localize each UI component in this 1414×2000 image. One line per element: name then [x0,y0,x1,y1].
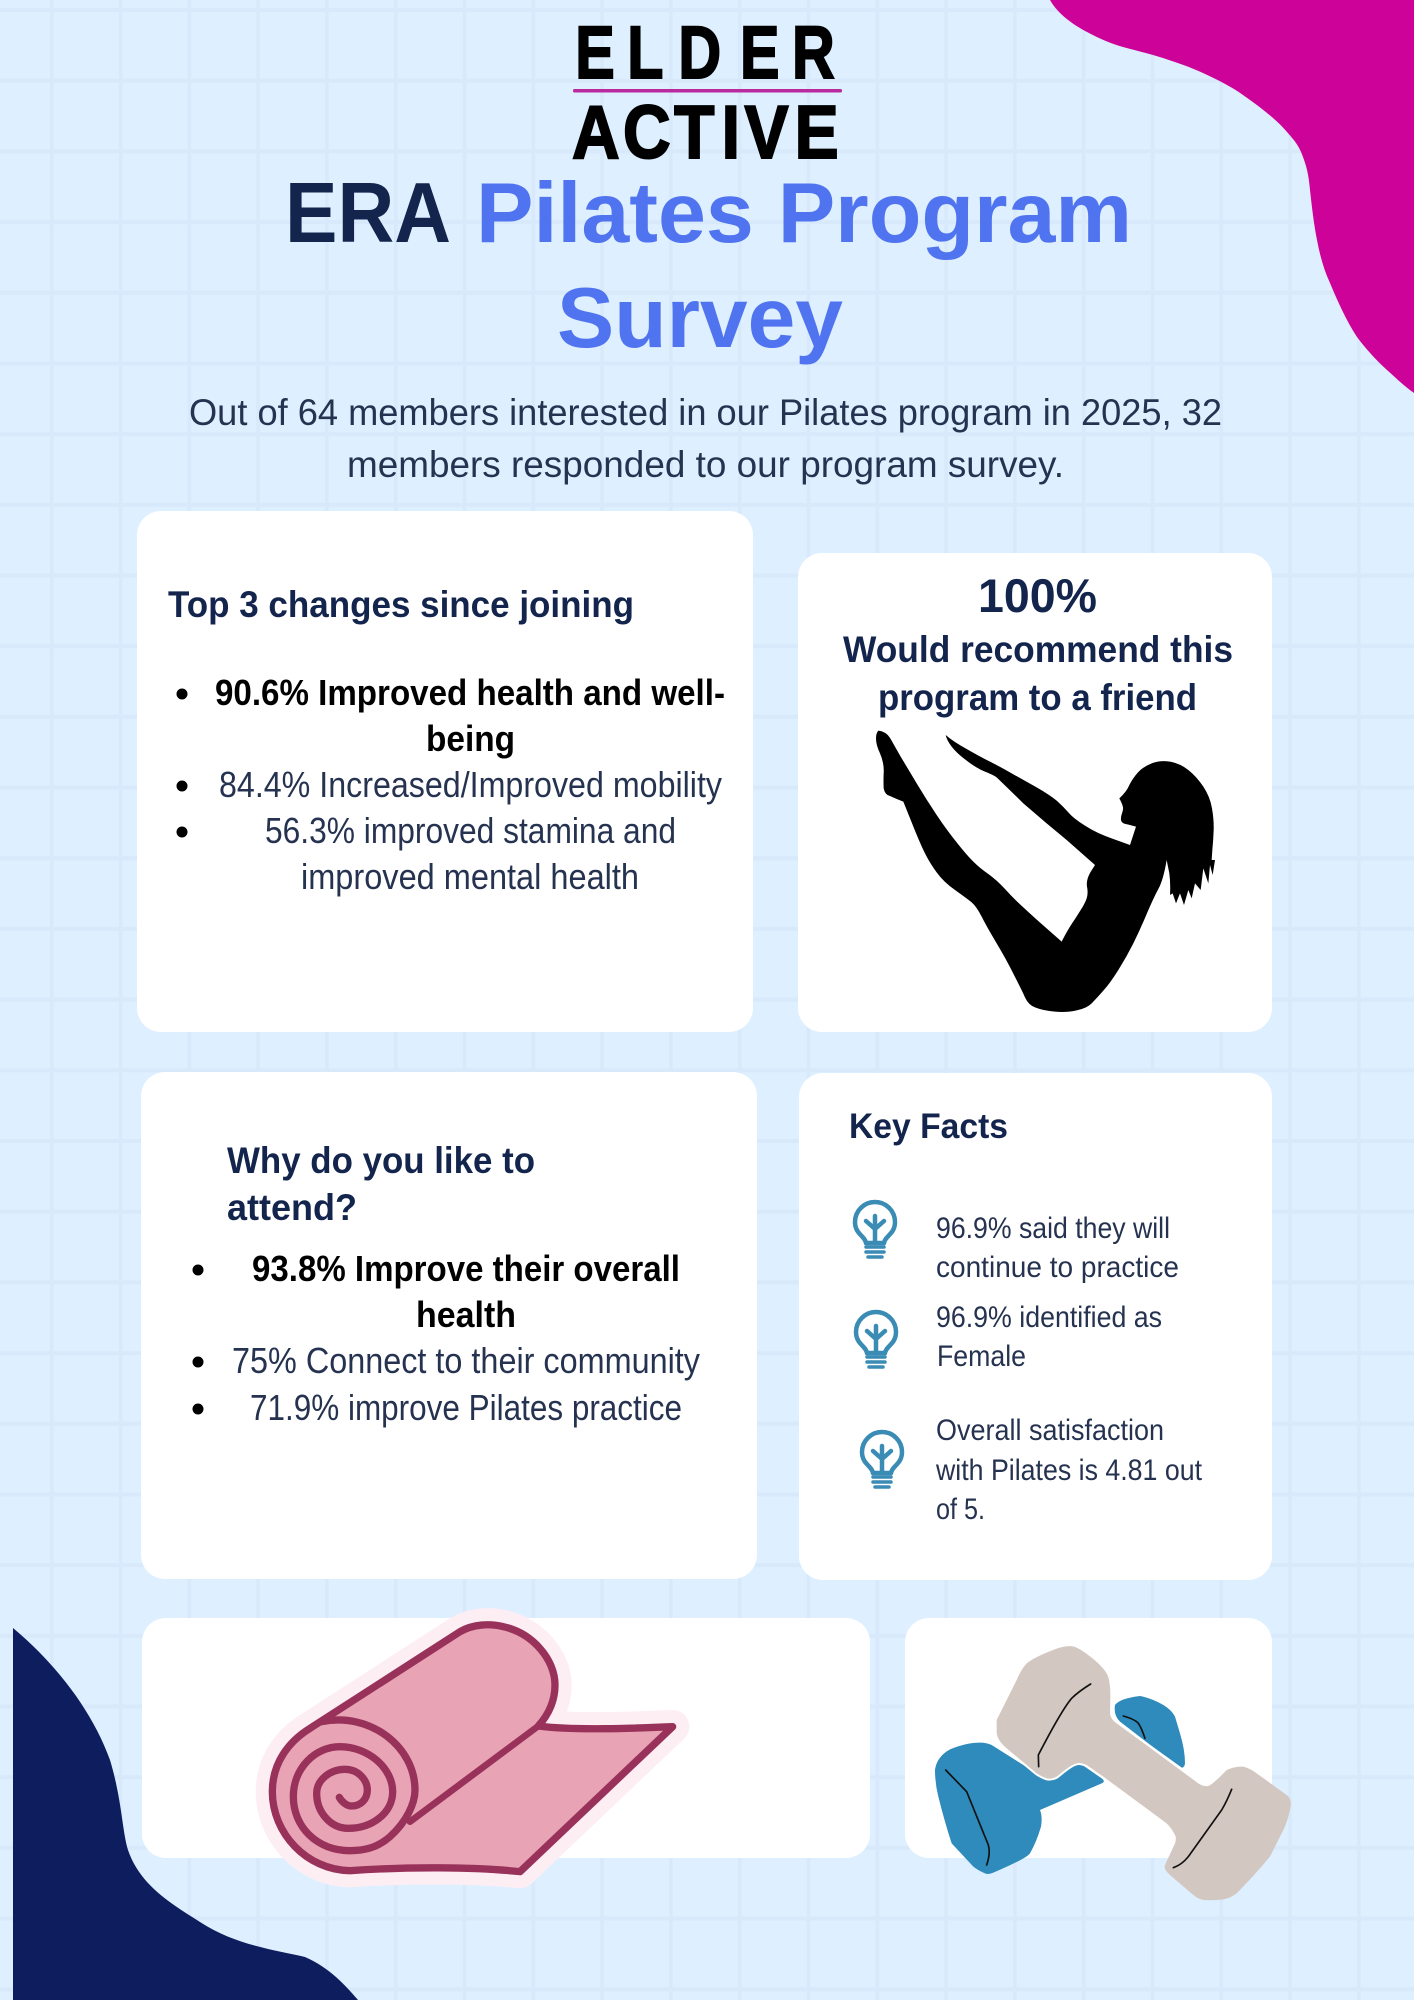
icon: light bulb 3 [862,1432,902,1487]
panel: recommend [798,553,1272,1032]
intro text: members responded to our program survey. [347,444,1064,485]
list: changes: improved mental health [301,856,639,897]
heading: why attend [227,1140,535,1228]
fact: overall satisfaction: of 5. [936,1493,985,1526]
stat: 100%: 100% [978,569,1097,622]
heading: key facts: Key Facts [849,1107,1008,1146]
list: changes: 56.3% improved stamina and [265,810,676,851]
fact: continue to practice [936,1212,1179,1284]
title: Pilates Program [476,166,1132,261]
icon: pilates silhouette [876,731,1215,1012]
recommend caption [843,629,1233,718]
title: ERA [285,166,451,261]
panel: key facts [799,1073,1272,1580]
list: reasons: 71.9% improve Pilates practice [250,1387,682,1428]
title [285,166,1132,366]
fact: overall satisfaction: with Pilates is 4.81 out [935,1454,1203,1487]
logo word ELDER: ELDER [575,12,835,95]
heading: why attend: Why do you like to [227,1140,535,1181]
panel: top 3 changes [137,511,753,1032]
icon: light bulb 2 [856,1312,896,1367]
panel: dumbbell card [905,1618,1272,1858]
panel: yoga mat card [142,1618,870,1858]
icon: light bulb 1 [855,1202,895,1257]
icon: rolled yoga mat [272,1625,673,1872]
panel: why attend [141,1072,757,1579]
list: changes: 84.4% Increased/Improved mobility [219,764,722,805]
list: reasons [192,1248,700,1428]
fact: identified as female [936,1301,1162,1373]
list: reasons: 75% Connect to their community [232,1340,700,1381]
heading: top 3 changes: Top 3 changes since joining [168,584,634,625]
fact: overall satisfaction [935,1414,1203,1526]
logo word ACTIVE: ACTIVE [572,90,839,174]
intro text [189,392,1222,485]
recommend caption: program to a friend [878,677,1197,718]
fact: continue to practice: 96.9% said they will [936,1212,1170,1245]
fact: identified as female: Female [937,1340,1026,1373]
title: Survey [557,271,843,366]
fact: continue to practice: continue to practice [936,1251,1179,1284]
list: changes: being [426,718,515,759]
icon: dumbbells [935,1646,1291,1900]
recommend caption: Would recommend this [843,629,1233,670]
heading: why attend: attend? [227,1187,357,1228]
fact: overall satisfaction: Overall satisfaction [936,1414,1164,1447]
fact: identified as female: 96.9% identified as [936,1301,1162,1334]
magenta corner blob [1050,0,1414,393]
navy corner blob [13,1628,358,2000]
list: reasons: 93.8% Improve their overall [252,1248,680,1289]
list: changes [176,672,725,897]
logo underline [573,89,842,92]
list: reasons: health [416,1294,516,1335]
list: changes: 90.6% Improved health and well- [215,672,725,713]
intro text: Out of 64 members interested in our Pilates program in 2025, 32 [189,392,1222,433]
logo [572,12,842,174]
